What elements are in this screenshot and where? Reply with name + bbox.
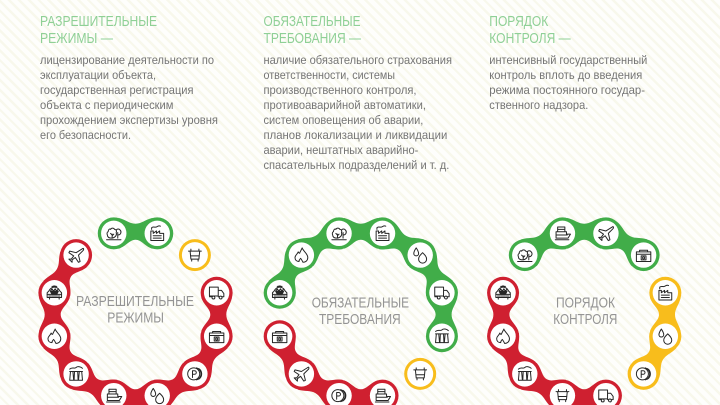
heading: обязательные требования [264,13,361,47]
icon: cooling towers [426,320,458,352]
icon: forest [323,217,355,249]
ring label: порядок контроля: КОНТРОЛЯ [553,311,617,328]
icon: parking coin [628,358,660,390]
ring label: разрешительные режимы [76,293,194,326]
icon: fire [285,239,317,271]
column: обязательные требования [264,13,452,172]
ring label: разрешительные режимы: РАЗРЕШИТЕЛЬНЫЕ [76,293,194,310]
heading: порядок контроля [489,13,571,47]
text block: обязательные требования: ответственности, системы [264,68,395,82]
text block: порядок контроля: ственного надзора. [489,98,588,112]
ring label: порядок контроля [553,294,617,328]
ring label: порядок контроля: ПОРЯДОК [556,294,615,312]
text block: порядок контроля: режима постоянного государ- [489,83,645,97]
text block: разрешительные режимы: государственная регистрация [40,83,194,97]
nodes: ring 3 icons [487,217,681,405]
heading: разрешительные режимы: РАЗРЕШИТЕЛЬНЫЕ [40,13,157,30]
icon: factory [141,217,173,249]
icon: ship [546,217,578,249]
icon: drops [141,380,173,405]
icon: waste bin [546,380,578,405]
text block: разрешительные режимы: прохождением экспертизы уровня [40,113,218,127]
text block: обязательные требования: наличие обязательного страхования [264,53,452,67]
icon: parking coin [179,358,211,390]
heading: разрешительные режимы: РЕЖИМЫ — [40,30,113,47]
chain: ring 3 links [488,218,681,405]
icon: plane [590,217,622,249]
text block: разрешительные режимы [40,53,218,142]
text block: порядок контроля [489,53,647,112]
icon: parking coin [323,380,355,405]
chain: ring 2 links [269,218,457,405]
ring label: разрешительные режимы: РЕЖИМЫ [107,310,164,326]
text block: обязательные требования: противоаварийной автоматики, [264,98,426,112]
heading: разрешительные режимы [40,13,157,47]
icon: bus [264,277,296,309]
heading: порядок контроля: КОНТРОЛЯ — [489,30,571,47]
icon: fire [38,320,70,352]
icon: camera [264,320,296,352]
icon: forest [98,217,130,249]
ring diagram: обязательные требования [264,217,458,405]
column: разрешительные режимы [40,13,218,142]
icon: truck [201,277,233,309]
column: порядок контроля [489,13,647,112]
icon: factory [367,217,399,249]
text block: обязательные требования: аварии, нештатных аварийно- [264,143,418,157]
text block: порядок контроля: контроль вплоть до введения [489,68,642,82]
icon: camera [628,239,660,271]
text block: разрешительные режимы: эксплуатации объекта, [40,68,156,82]
text block: разрешительные режимы: его безопасности. [40,128,131,142]
icon: plane [60,239,92,271]
heading: порядок контроля: ПОРЯДОК [489,13,549,30]
icon: truck [590,380,622,405]
text block: обязательные требования: производственного контроля, [264,83,416,97]
icon: forest [509,239,541,271]
nodes: ring 1 icons [38,217,233,405]
text block: обязательные требования: систем оповещения об аварии, [264,113,423,127]
nodes: ring 2 icons [264,217,458,405]
icon: ship [98,380,130,405]
ring label: обязательные требования: ТРЕБОВАНИЯ [319,311,401,328]
text block: обязательные требования: спасательных подразделений и т. д. [264,158,449,172]
icon: fire [487,320,519,352]
text block: обязательные требования [264,53,452,172]
ring label: обязательные требования: ОБЯЗАТЕЛЬНЫЕ [312,294,409,312]
icon: bus [38,277,70,309]
heading: обязательные требования: ОБЯЗАТЕЛЬНЫЕ [264,13,360,30]
icon: factory [649,277,681,309]
text block: порядок контроля: интенсивный государственный [489,53,647,67]
ring label: обязательные требования [312,294,409,328]
icon: drops [404,239,436,271]
icon: ship [367,380,399,405]
icon: plane [285,358,317,390]
icon: cooling towers [509,358,541,390]
text block: разрешительные режимы: объекта с периодическим [40,98,174,112]
ring diagram: разрешительные режимы [38,217,233,405]
ring diagram: порядок контроля [487,217,681,405]
icon: waste bin [179,239,211,271]
icon: bus [487,277,519,309]
icon: drops [649,320,681,352]
chain: ring 1 links [39,218,232,405]
icon: cooling towers [60,358,92,390]
icon: truck [426,277,458,309]
text block: разрешительные режимы: лицензирование деятельности по [40,53,214,67]
icon: waste bin [404,358,436,390]
heading: обязательные требования: ТРЕБОВАНИЯ — [264,30,361,47]
text block: обязательные требования: планов локализации и ликвидации [264,128,447,142]
icon: camera [201,320,233,352]
